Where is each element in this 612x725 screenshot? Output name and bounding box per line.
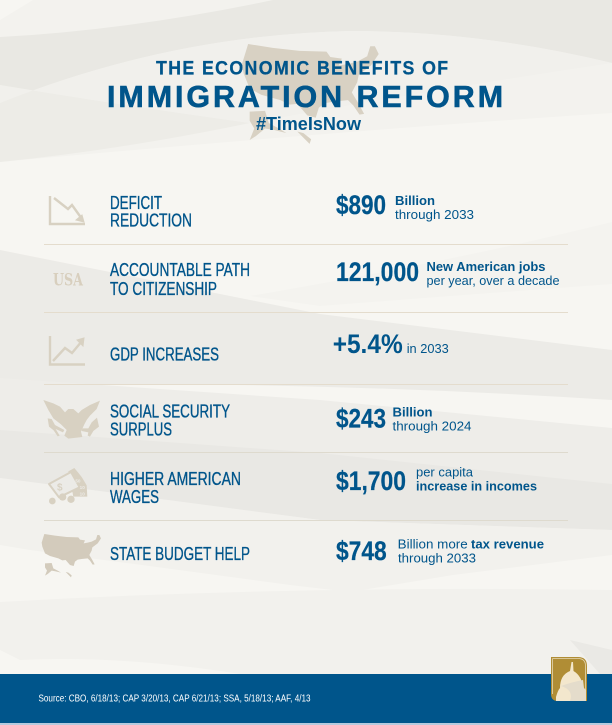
value: per capita	[416, 465, 474, 480]
icon: falling chart	[50, 196, 85, 224]
value	[336, 404, 472, 434]
value: +5.4%	[333, 329, 403, 359]
title line 2: IMMIGRATION REFORM	[107, 79, 506, 114]
icon: money: 10	[80, 491, 85, 496]
icon: eagle	[43, 400, 100, 439]
label: DEFICIT	[110, 193, 162, 213]
value: per year, over a decade	[426, 273, 560, 288]
label: SURPLUS	[110, 420, 172, 440]
title	[107, 58, 506, 134]
row: wages	[49, 465, 537, 507]
value: through 2024	[392, 419, 472, 434]
value: Billion	[392, 405, 433, 420]
label	[110, 193, 192, 231]
value	[336, 257, 560, 288]
icon: rising chart	[50, 336, 85, 364]
title line 1: THE ECONOMIC BENEFITS OF	[156, 58, 450, 79]
icon: money: 10	[80, 485, 85, 490]
label: ACCOUNTABLE PATH	[110, 260, 250, 280]
row: deficit reduction	[50, 190, 474, 231]
value: through 2033	[395, 207, 474, 222]
label	[110, 469, 241, 507]
map behind title	[242, 44, 379, 144]
label: REDUCTION	[110, 211, 192, 231]
icon: money: 50	[75, 479, 81, 484]
icon: US map	[42, 534, 101, 577]
label: GDP INCREASES	[110, 345, 219, 365]
icon: money: $	[57, 483, 63, 494]
source note: Source: CBO, 6/18/13; CAP 3/20/13, CAP 6/21/13; SSA, 5/18/13; AAF, 4/13	[38, 694, 311, 704]
value: through 2033	[398, 551, 476, 566]
label: WAGES	[110, 487, 159, 507]
label: TO CITIZENSHIP	[110, 279, 217, 299]
label: HIGHER AMERICAN	[110, 469, 241, 489]
value	[336, 536, 544, 566]
value	[333, 329, 449, 359]
label	[110, 402, 230, 440]
value	[336, 465, 537, 496]
value: $890	[336, 190, 386, 220]
hashtag: #TimeIsNow	[256, 113, 362, 134]
icon: USA stamp: USA	[53, 271, 84, 291]
value: New American jobs	[426, 259, 546, 274]
row dividers	[44, 244, 568, 520]
row: state budget	[42, 534, 544, 577]
value: Billion	[395, 193, 435, 208]
row: accountable path	[53, 257, 560, 299]
logo: capitol dome	[551, 657, 587, 701]
icon: money	[49, 468, 87, 504]
value: $748	[336, 536, 387, 566]
value	[336, 190, 474, 222]
footer bar	[0, 674, 612, 725]
row: GDP	[50, 329, 449, 365]
label: SOCIAL SECURITY	[110, 402, 230, 422]
value: in 2033	[407, 341, 449, 356]
value: increase in incomes	[416, 479, 537, 494]
label: STATE BUDGET HELP	[110, 544, 250, 564]
value: Billion more	[398, 537, 468, 552]
value: 121,000	[336, 257, 419, 287]
label	[110, 260, 250, 299]
value: tax revenue	[471, 537, 544, 552]
value: $1,700	[336, 466, 406, 496]
value: $243	[336, 404, 386, 434]
row: social security	[43, 400, 472, 440]
